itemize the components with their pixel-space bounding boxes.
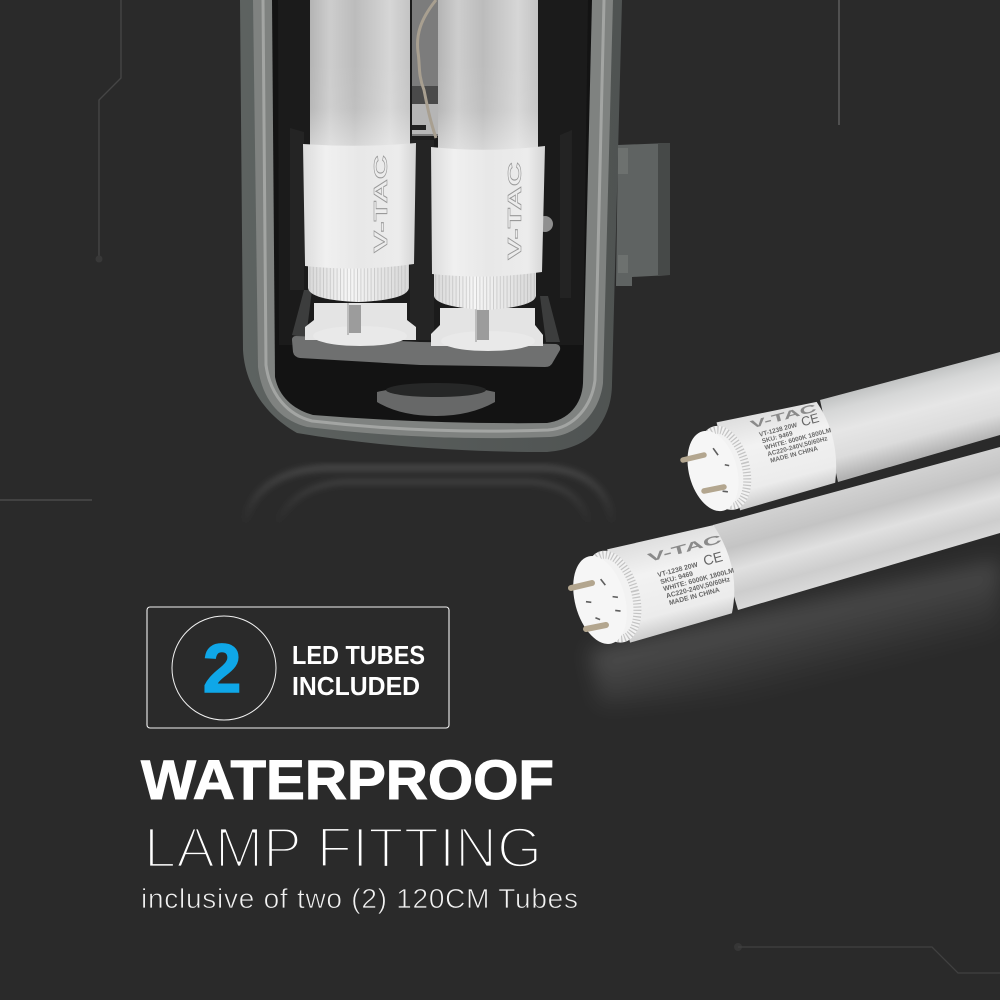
left collar	[303, 143, 416, 269]
left V-TAC logo: V-TAC	[371, 155, 391, 253]
number circle	[172, 616, 276, 720]
lower tube spec label: MADE IN CHINA	[668, 587, 721, 607]
upper tube spec label: SKU: 9469	[761, 430, 794, 445]
centre bracket	[410, 0, 438, 340]
upper tube logo: V-TAC	[749, 402, 818, 432]
lower LED tube	[564, 447, 1000, 654]
lower tube CE mark: CE	[701, 548, 724, 569]
lower tube body	[713, 447, 1000, 610]
right ribbed ring	[434, 272, 536, 310]
badge label: LED TUBES	[292, 640, 425, 670]
badge frame	[147, 607, 449, 728]
lower tube pins	[571, 583, 606, 629]
lower tube logo: V-TAC	[646, 532, 724, 565]
lower tube spec label	[657, 553, 739, 608]
lower tube spec label: SKU: 9469	[660, 571, 694, 586]
subtitle: inclusive of two (2) 120CM Tubes	[141, 883, 578, 914]
upper tube body	[820, 352, 1000, 482]
tube glow reflection	[590, 560, 1000, 705]
lower tube end cap	[564, 519, 745, 654]
circuit line: top left	[96, 0, 121, 262]
left lamp socket	[305, 303, 416, 346]
socket arms	[292, 290, 560, 342]
upper tube CE mark: CE	[799, 410, 821, 429]
left ribbed ring	[308, 264, 409, 302]
lower tube spec label: AC220-240V,50/60Hz	[666, 576, 732, 600]
upper tube spec label: VT-1238 20W	[758, 422, 799, 439]
heading: waterproof: WATERPROOF	[141, 748, 554, 811]
mounting plate	[292, 336, 560, 367]
circuit line: left	[0, 499, 92, 501]
upper tube spec label: MADE IN CHINA	[770, 445, 819, 465]
left tube	[310, 0, 410, 148]
rubber gasket	[253, 0, 613, 438]
upper LED tube	[678, 352, 1000, 521]
rear wall shading	[278, 0, 588, 345]
upper tube pins	[683, 455, 724, 491]
circuit line: top right	[838, 0, 840, 125]
upper tube spec label: AC220-240V,50/60Hz	[767, 435, 828, 458]
upper tube spec label: WHITE: 6000K 1800LM	[764, 427, 832, 452]
upper tube spec label	[758, 414, 836, 466]
lower tube spec label: WHITE: 6000K 1800LM	[663, 567, 735, 593]
circuit line: bottom right	[734, 943, 1000, 973]
badge label	[292, 640, 425, 701]
waterproof fixture	[240, 0, 670, 452]
number 2: 2	[203, 630, 241, 707]
badge: 2 LED tubes included	[147, 607, 449, 728]
inner cavity	[272, 0, 592, 423]
lower tube spec label: VT-1238 20W	[657, 561, 699, 579]
side latch bracket	[616, 143, 670, 286]
screw	[537, 216, 553, 232]
right lamp socket	[431, 308, 543, 351]
right tube	[438, 0, 538, 152]
gasket highlight	[263, 0, 604, 431]
inner support left	[290, 128, 304, 290]
heading: lamp fitting: LAMP FITTING	[144, 816, 542, 880]
rear puck	[377, 383, 495, 416]
housing shell	[240, 0, 622, 452]
inner support right	[560, 130, 572, 298]
fixture reflection	[245, 468, 612, 530]
upper tube end cap	[678, 394, 845, 521]
right V-TAC logo: V-TAC	[505, 162, 525, 260]
badge label: INCLUDED	[292, 671, 420, 701]
right collar	[431, 146, 545, 277]
